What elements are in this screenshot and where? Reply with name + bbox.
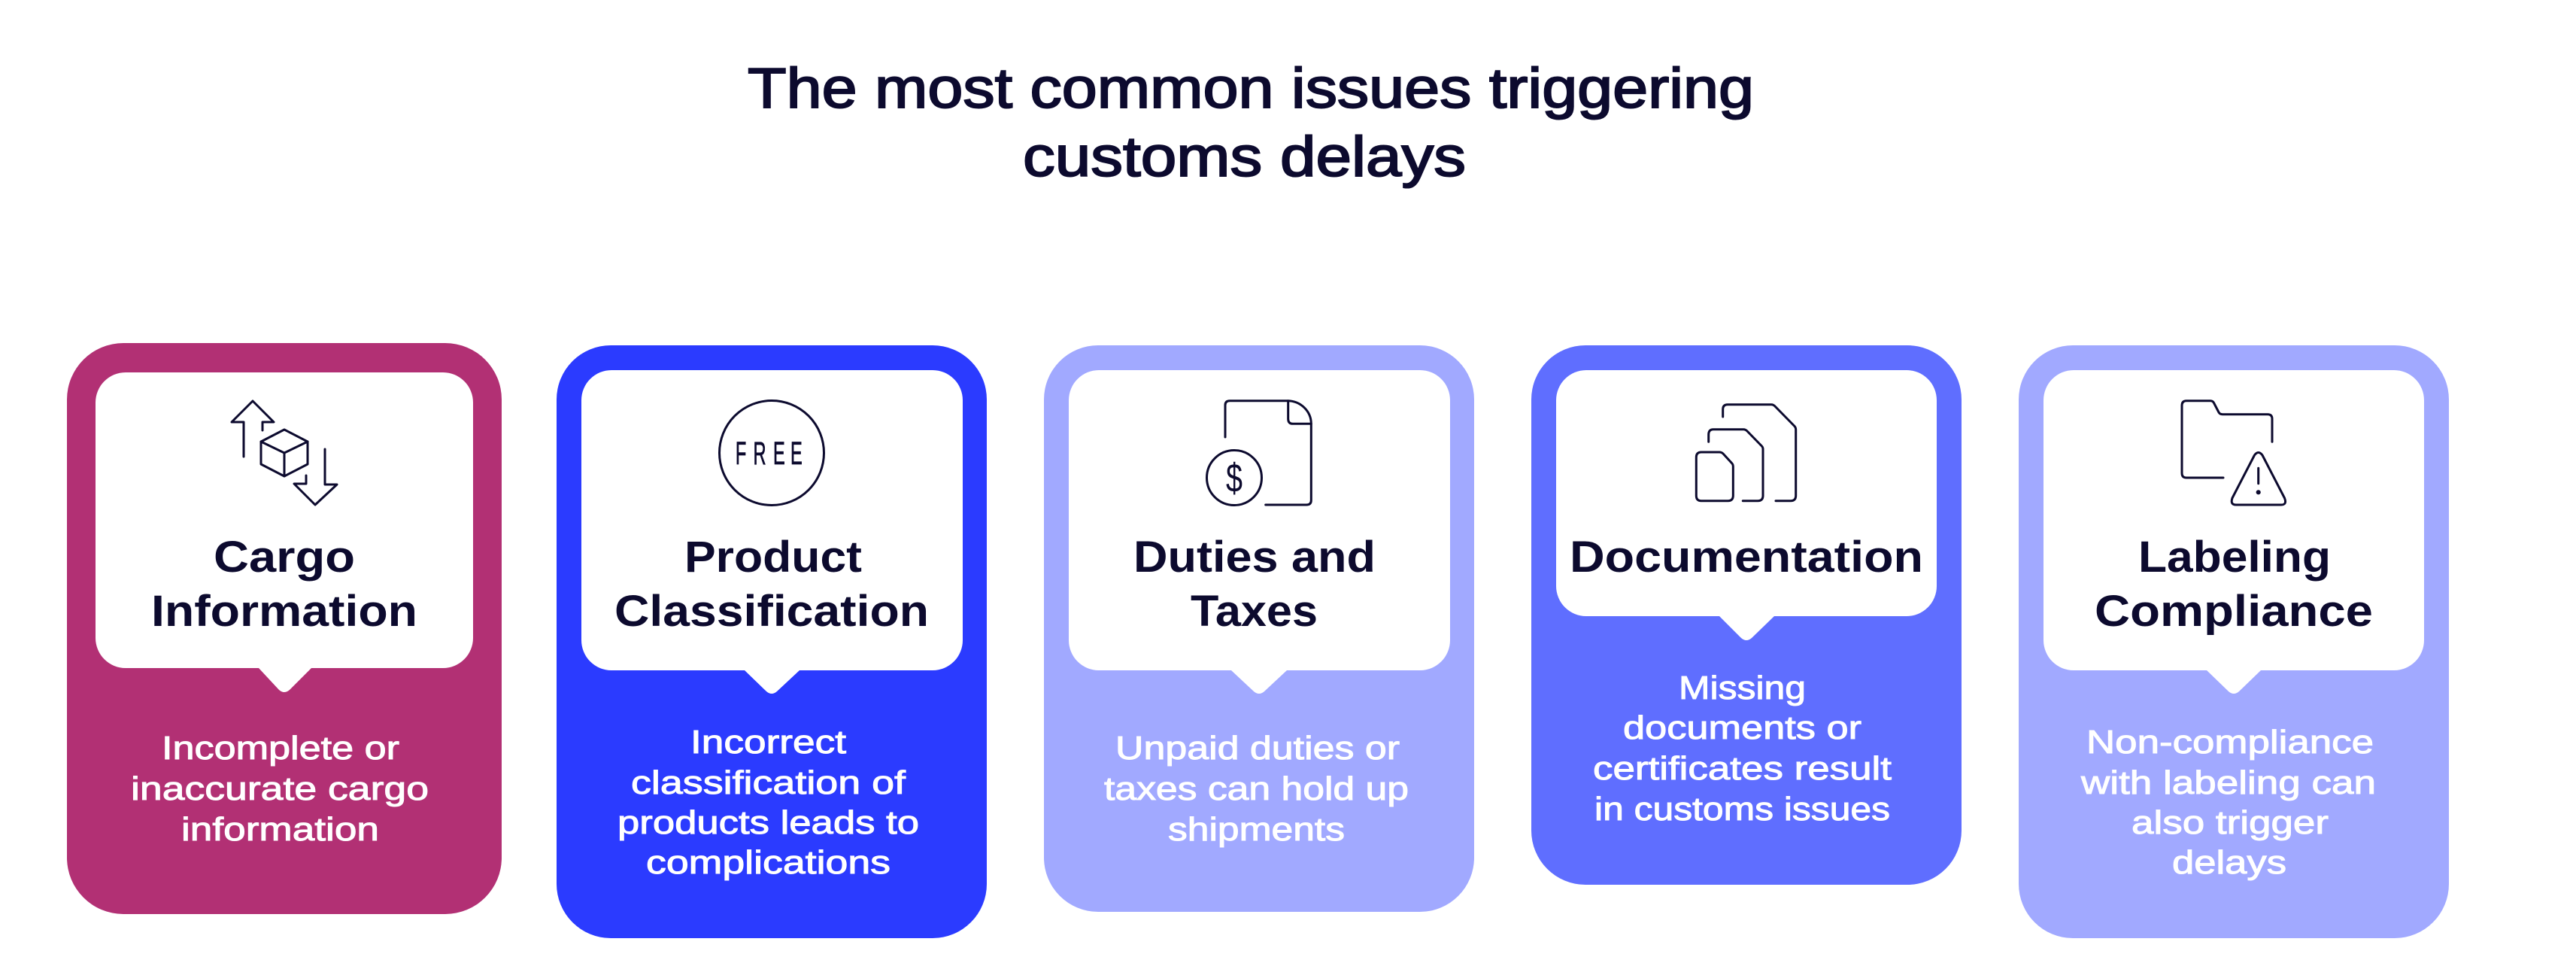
description: labeling compliance	[2080, 724, 2376, 881]
icon: document with dollar coin	[1206, 401, 1311, 506]
speech bubble: labeling compliance	[2044, 370, 2424, 694]
description: cargo information: inaccurate cargo	[131, 770, 429, 807]
description: product classification: products leads to	[617, 804, 919, 841]
description: duties and taxes: shipments	[1168, 811, 1345, 848]
description: labeling compliance: delays	[2172, 844, 2286, 881]
speech bubble: cargo information	[96, 372, 473, 692]
heading: labeling compliance	[2095, 533, 2373, 636]
speech bubble: product classification	[581, 370, 963, 694]
panel: duties and taxes	[1044, 345, 1474, 912]
heading: duties and taxes: Taxes	[1191, 587, 1318, 636]
heading: duties and taxes: Duties and	[1133, 533, 1376, 582]
heading: cargo information: Information	[151, 587, 417, 636]
heading: cargo information	[151, 533, 417, 636]
heading: product classification: Classification	[614, 587, 929, 636]
description: documentation: documents or	[1623, 709, 1861, 746]
heading: duties and taxes	[1133, 533, 1376, 636]
panel: documentation	[1531, 345, 1962, 885]
title: The most common issues triggering	[748, 56, 1754, 120]
description: documentation: certificates result	[1593, 750, 1892, 787]
speech bubble: documentation	[1556, 370, 1937, 640]
panel: labeling compliance	[2019, 345, 2449, 938]
heading: labeling compliance: Compliance	[2095, 587, 2373, 636]
description: cargo information: Incomplete or	[162, 730, 399, 767]
heading: cargo information: Cargo	[214, 533, 355, 582]
icon: folder with warning triangle	[2182, 401, 2286, 505]
title: customs delays	[1023, 125, 1466, 188]
description: duties and taxes: taxes can hold up	[1104, 770, 1409, 807]
description: cargo information	[131, 730, 429, 848]
heading: labeling compliance: Labeling	[2138, 533, 2331, 582]
description: duties and taxes	[1104, 730, 1409, 848]
icon: box with up and down arrows	[232, 401, 337, 505]
heading: product classification	[614, 533, 929, 636]
description: product classification: Incorrect	[690, 724, 846, 761]
description: product classification: classification of	[631, 764, 906, 801]
panel: product classification	[557, 345, 987, 938]
description: labeling compliance: with labeling can	[2080, 764, 2376, 801]
description: labeling compliance: also trigger	[2131, 804, 2329, 841]
description: product classification	[617, 724, 919, 881]
description: documentation: Missing	[1679, 670, 1806, 706]
description: product classification: complications	[646, 844, 891, 881]
icon: free badge: FREE	[736, 436, 803, 472]
speech bubble: duties and taxes	[1069, 370, 1450, 694]
heading: documentation: Documentation	[1570, 533, 1923, 582]
title	[748, 56, 1754, 188]
panel: cargo information	[67, 343, 502, 914]
description: labeling compliance: Non-compliance	[2086, 724, 2374, 761]
description: duties and taxes: Unpaid duties or	[1115, 730, 1400, 767]
icon: stacked documents	[1696, 405, 1796, 501]
description: documentation	[1593, 670, 1892, 828]
icon: document with dollar coin: $	[1226, 456, 1242, 501]
description: documentation: in customs issues	[1594, 791, 1890, 828]
icon: free badge	[719, 400, 824, 506]
heading: product classification: Product	[684, 533, 862, 582]
description: cargo information: information	[181, 811, 379, 848]
